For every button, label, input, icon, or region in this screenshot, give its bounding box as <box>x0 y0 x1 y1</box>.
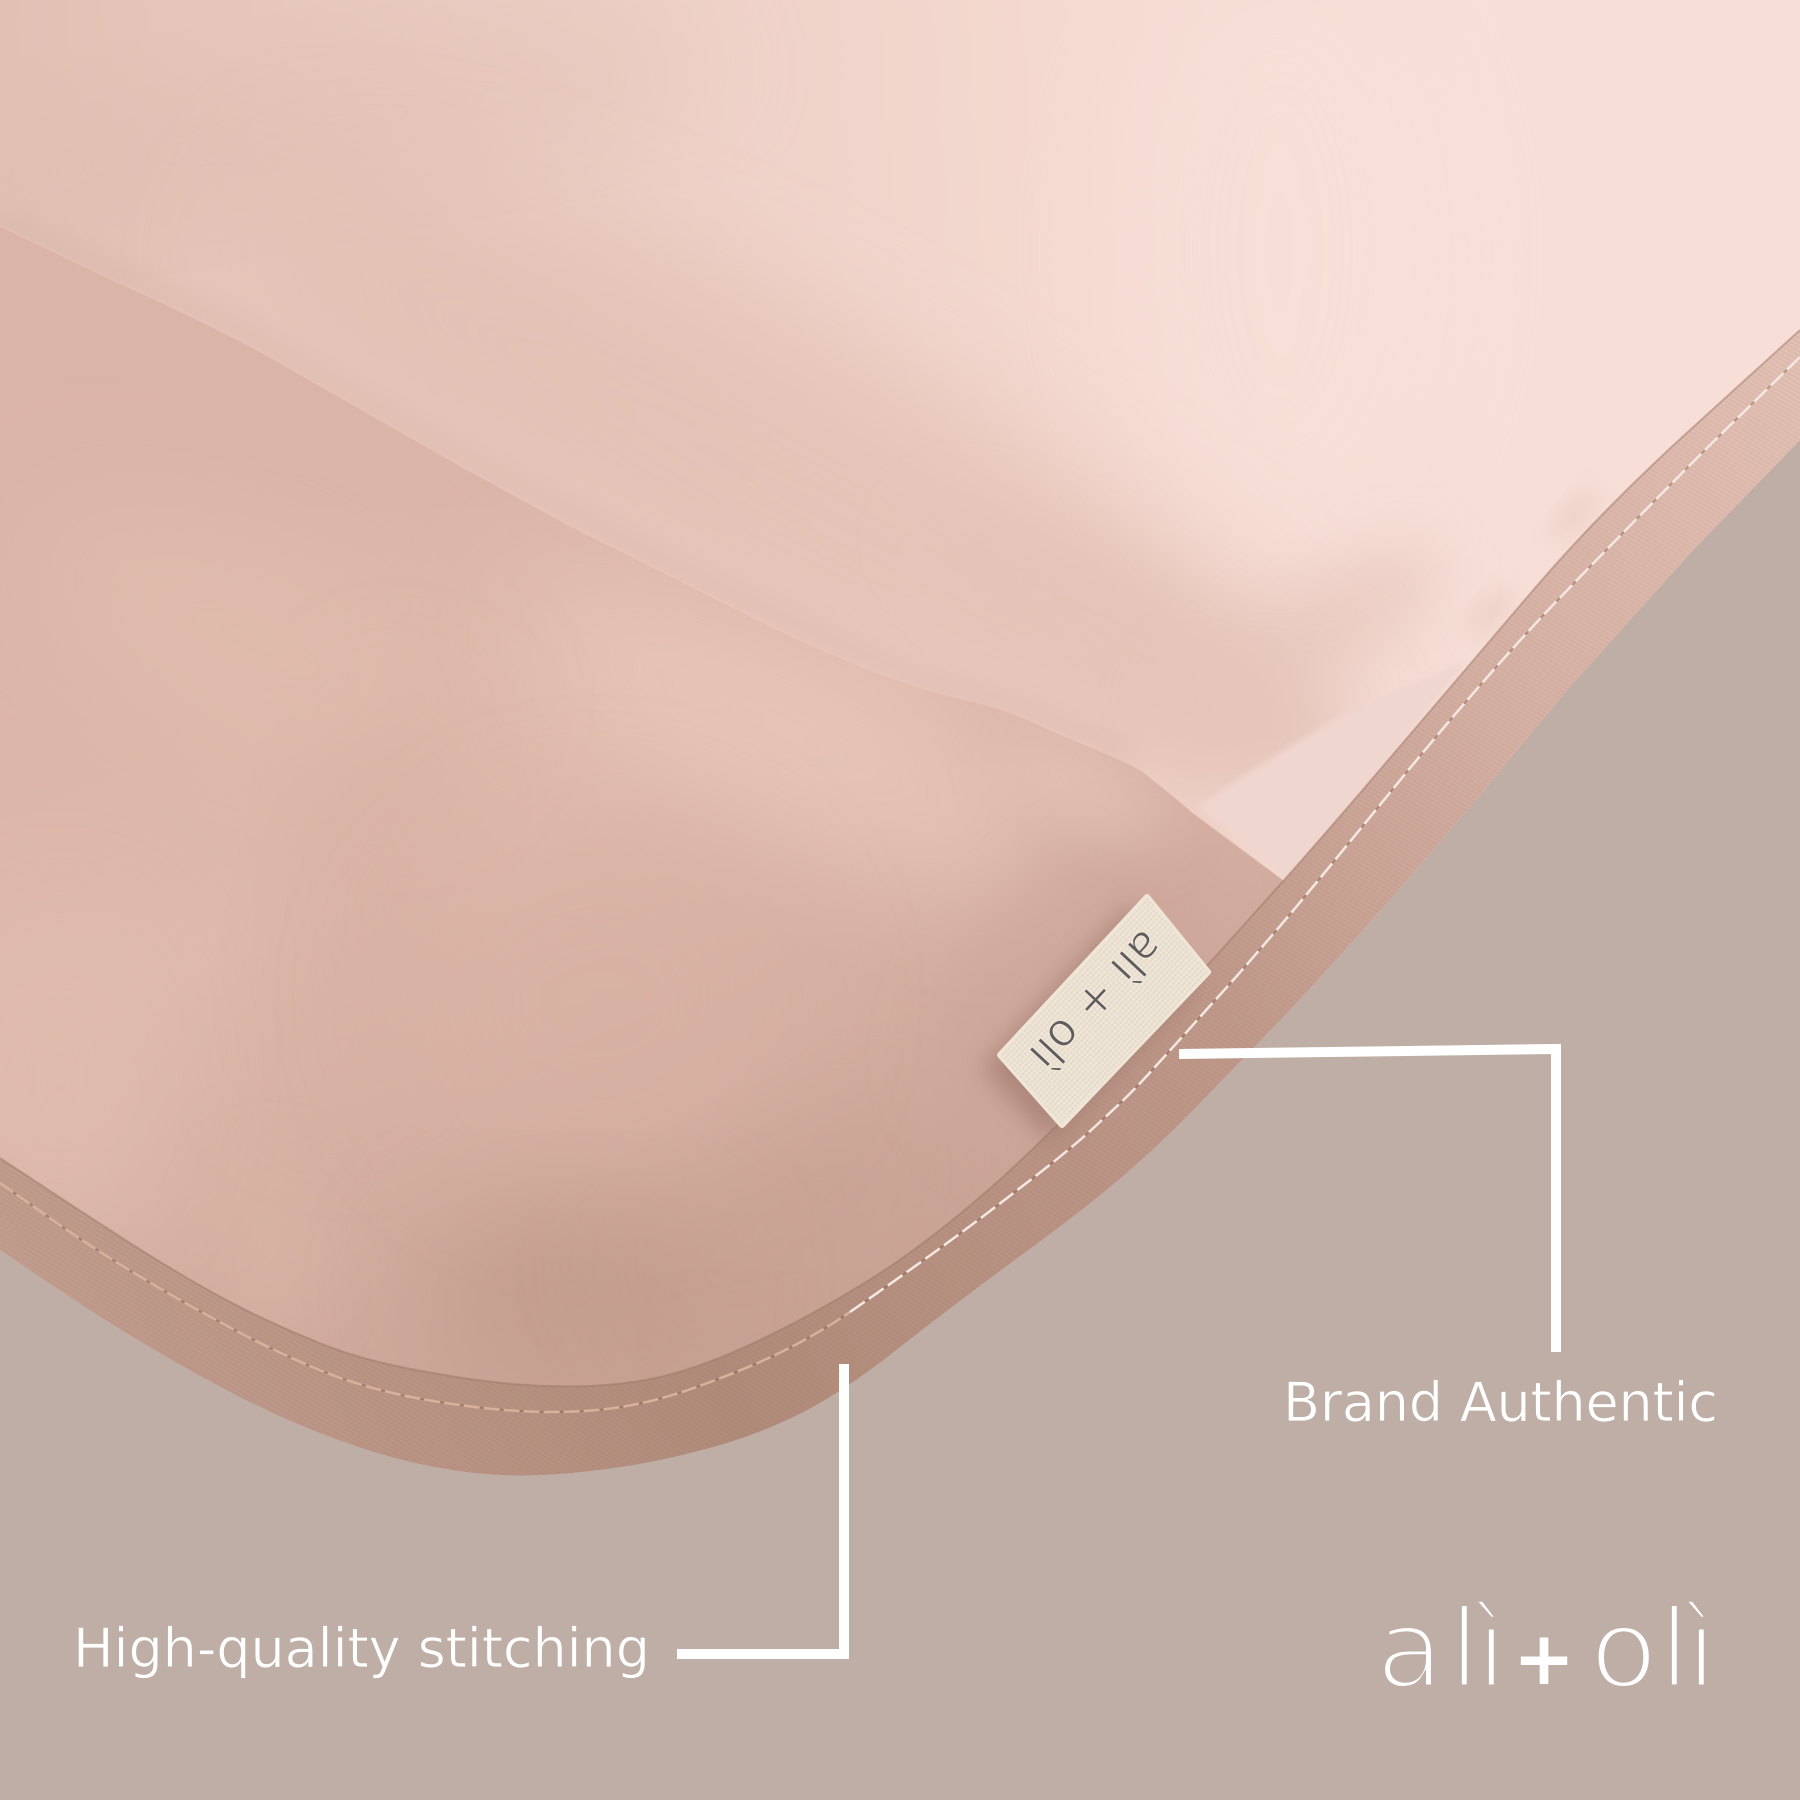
callout: high-quality stitching <box>73 1364 844 1680</box>
panel: front pocket <box>0 227 1284 1386</box>
stitching: lower seam <box>0 1183 850 1412</box>
leader line to seam <box>677 1364 844 1654</box>
callout label: High-quality stitching <box>73 1617 650 1680</box>
callout label: Brand Authentic <box>1283 1371 1718 1434</box>
tag text: alì + olì <box>1018 920 1175 1082</box>
logo: + <box>1513 1616 1575 1702</box>
logo: alì <box>1376 1585 1507 1713</box>
pocket top edge <box>0 226 1283 880</box>
leader line to tag <box>1179 1049 1556 1352</box>
logo <box>1376 1585 1717 1713</box>
logo: olì <box>1590 1585 1717 1713</box>
stitching: upper seam <box>850 357 1800 1312</box>
icon: woven brand tag <box>982 897 1208 1142</box>
panel: back sheet of bib <box>0 0 1800 1300</box>
callout: brand authentic <box>1179 1049 1718 1434</box>
binding band <box>0 330 1800 1600</box>
